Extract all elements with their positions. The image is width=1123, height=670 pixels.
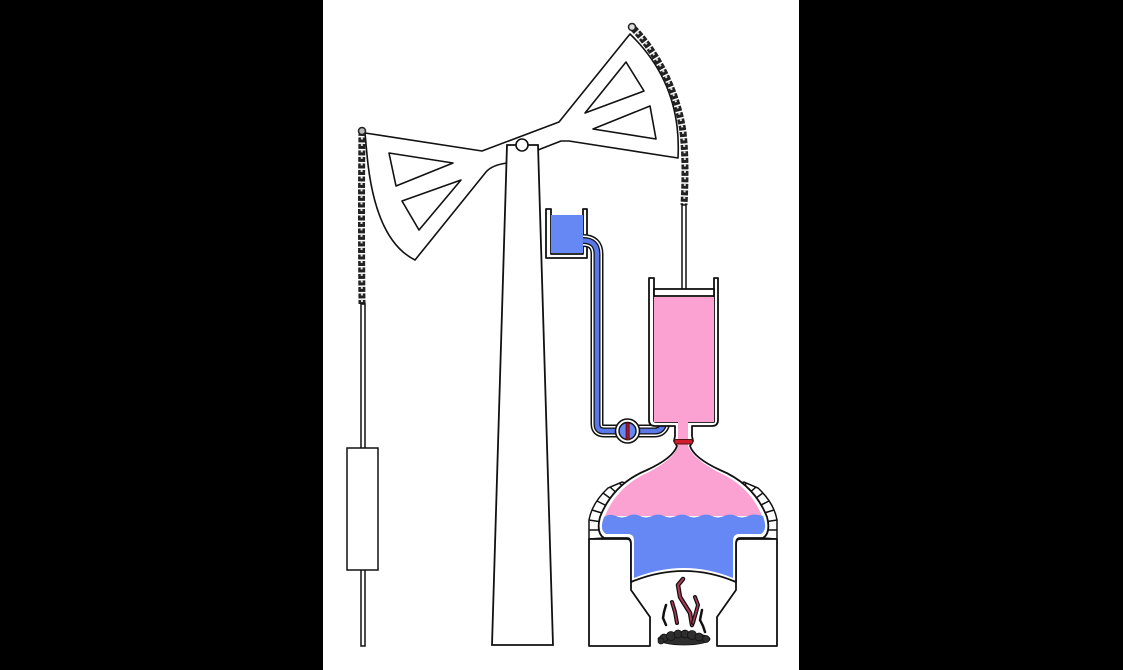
pivot circle	[516, 139, 528, 151]
right chain	[628, 24, 685, 205]
brick arch left	[589, 482, 632, 539]
brick arch right	[734, 482, 777, 539]
right piston rod	[682, 205, 686, 291]
left chain	[358, 128, 366, 304]
steam valve	[674, 440, 692, 444]
white page panel	[323, 0, 799, 670]
water valve	[616, 419, 640, 443]
steam cylinder and boiler outline	[599, 278, 768, 582]
water cistern	[546, 209, 587, 258]
boiler water	[602, 514, 765, 578]
pivoting rocker beam	[365, 34, 678, 260]
left pump rod with counterweight	[347, 304, 378, 646]
steam in boiler and neck	[605, 421, 762, 516]
furnace masonry blocks	[589, 539, 777, 646]
coal bed	[658, 630, 710, 645]
flames	[663, 579, 705, 632]
water feed pipe	[583, 240, 664, 431]
engine support post	[492, 145, 553, 645]
